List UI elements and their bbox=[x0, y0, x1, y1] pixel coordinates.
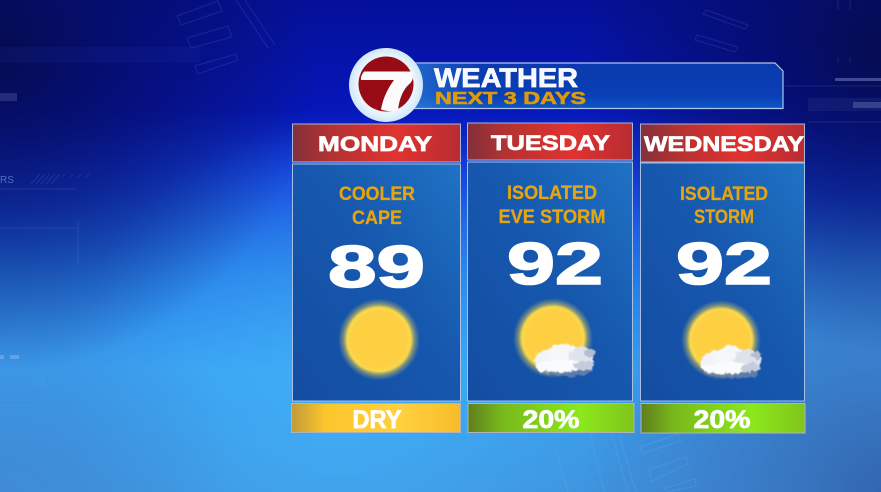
day header bbox=[640, 124, 804, 162]
precipitation bar: 20%: 20% bbox=[694, 406, 750, 434]
forecast body bbox=[292, 164, 460, 401]
icon: cloud bbox=[535, 344, 595, 376]
heading: weather: WEATHER bbox=[434, 63, 578, 93]
forecast text: CAPE bbox=[352, 208, 402, 229]
precipitation bar: 20%: 20% bbox=[522, 406, 580, 434]
background: RS bbox=[0, 175, 14, 186]
day header bbox=[468, 123, 632, 160]
banner bar bbox=[405, 63, 783, 108]
forecast body bbox=[468, 162, 632, 401]
precipitation bar: dry: DRY bbox=[352, 406, 402, 434]
day header: TUESDAY bbox=[491, 132, 610, 155]
icon: sun behind cloud bbox=[681, 300, 761, 380]
panel: wednesday bbox=[640, 124, 805, 434]
precipitation bar: 20% bbox=[641, 404, 805, 434]
title banner bbox=[405, 63, 783, 108]
temperature: 89 bbox=[328, 234, 425, 300]
day header bbox=[292, 124, 460, 162]
icon: sun behind cloud bbox=[513, 298, 595, 378]
forecast text: ISOLATED bbox=[507, 183, 597, 204]
forecast text: COOLER bbox=[339, 184, 415, 205]
subheading: next 3 days: NEXT 3 DAYS bbox=[435, 88, 586, 108]
icon: sun bbox=[338, 298, 420, 380]
forecast text: EVE STORM bbox=[498, 207, 606, 228]
forecast text: ISOLATED bbox=[680, 184, 768, 205]
forecast body bbox=[640, 163, 804, 401]
panel: monday bbox=[292, 124, 460, 434]
day header: WEDNESDAY bbox=[644, 133, 804, 156]
temperature: 92 bbox=[507, 231, 603, 297]
temperature: 92 bbox=[676, 231, 772, 297]
day header: MONDAY bbox=[318, 133, 432, 156]
panel: tuesday bbox=[468, 123, 634, 434]
precipitation bar: 20% bbox=[468, 404, 634, 434]
icon: cloud bbox=[701, 346, 761, 378]
logo: channel 7 bbox=[349, 48, 423, 122]
precipitation bar: dry bbox=[292, 404, 460, 434]
forecast text: STORM bbox=[694, 207, 754, 228]
